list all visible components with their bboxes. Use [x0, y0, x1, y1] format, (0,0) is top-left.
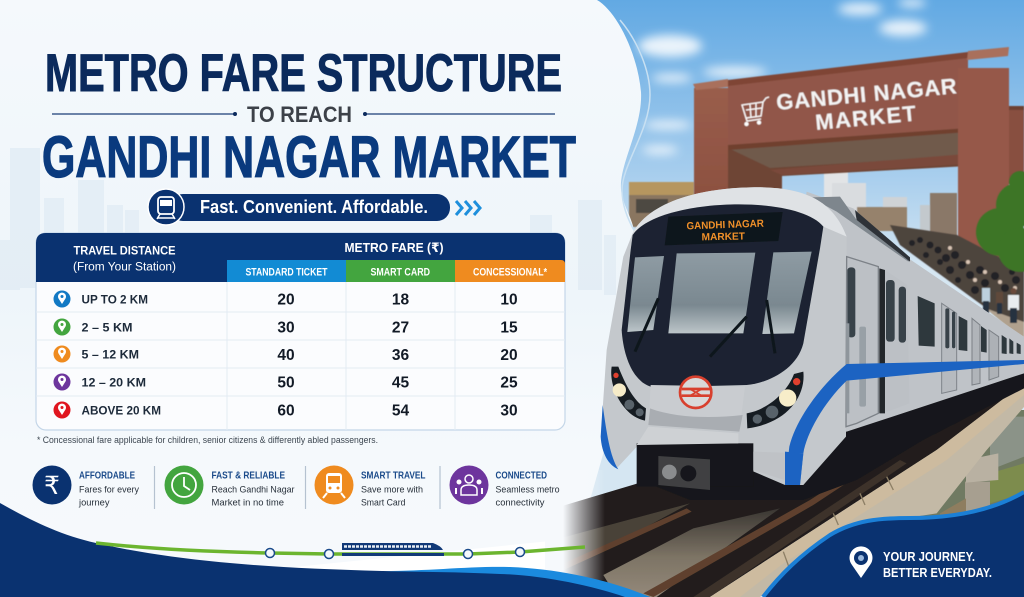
- feature: affordable: ₹: [44, 472, 60, 500]
- row: up to 2 km: [54, 290, 518, 308]
- destination display: [665, 212, 783, 245]
- feature: affordable: [32, 466, 139, 508]
- feature: fast and reliable: [164, 466, 294, 508]
- crowd street: [890, 225, 1024, 340]
- subtitle: to reach: [52, 102, 555, 127]
- train side body: [777, 192, 1024, 485]
- track fade into panel: [545, 470, 605, 580]
- row: 2-5 km: [54, 318, 518, 336]
- row: 12-20 km: [54, 374, 518, 392]
- front mask: [622, 204, 823, 387]
- row: up to 2 km: UP TO 2 KM: [82, 292, 148, 306]
- photo background: sky: [560, 0, 1024, 597]
- row: 12-20 km: 25: [500, 374, 518, 392]
- header: metro fare: METRO FARE (₹): [344, 240, 444, 255]
- row: 12-20 km: 50: [277, 374, 295, 392]
- footnote: * Concessional fare applicable for children, senior citizens & differently abled passengers.: [37, 435, 378, 445]
- destination display: GANDHI NAGAR: [686, 219, 765, 232]
- feature dividers: [154, 466, 440, 509]
- feature: connected: Seamless metro: [496, 484, 560, 496]
- roof grill: [810, 197, 910, 262]
- title: metro fare structure: METRO FARE STRUCTURE: [45, 44, 562, 103]
- coupler: [637, 443, 753, 490]
- feature: fast and reliable: FAST & RELIABLE: [212, 470, 285, 482]
- faint city skyline: [0, 148, 616, 295]
- row: 2-5 km: 15: [500, 320, 518, 336]
- icon: small train on line: [342, 543, 444, 556]
- feature: smart travel: SMART TRAVEL: [361, 470, 426, 482]
- undercarriage: [637, 373, 1024, 500]
- callout wave bottom right: [763, 492, 1024, 597]
- feature: affordable: AFFORDABLE: [79, 470, 135, 482]
- row: 12-20 km: 12 – 20 KM: [82, 376, 146, 390]
- metro route line: [96, 543, 585, 558]
- row: 5-12 km: [54, 346, 518, 364]
- row: above 20 km: [54, 402, 518, 420]
- row: 5-12 km: 20: [500, 347, 518, 364]
- column header: smart card: [346, 260, 455, 282]
- row: above 20 km: 60: [277, 402, 295, 420]
- title: gandhi nagar market: GANDHI NAGAR MARKET: [42, 125, 576, 190]
- row: above 20 km: ABOVE 20 KM: [82, 404, 161, 418]
- feature: smart travel: [314, 466, 426, 508]
- feature: connected: CONNECTED: [496, 470, 547, 482]
- train front body: [601, 187, 847, 485]
- header: travel distance: TRAVEL DISTANCE: [74, 246, 176, 258]
- feature: affordable: journey: [78, 498, 110, 508]
- column header: standard ticket: STANDARD TICKET: [246, 266, 328, 278]
- column header: concessional: CONCESSIONAL*: [473, 266, 548, 278]
- row: 5-12 km: 36: [392, 347, 409, 364]
- fare table: [36, 233, 565, 430]
- feature: fast and reliable: Market in no time: [212, 498, 284, 508]
- row: up to 2 km: 18: [392, 292, 409, 308]
- feature: fast and reliable: Reach Gandhi Nagar: [212, 484, 294, 496]
- metro train: [601, 187, 1024, 500]
- tagline pill: Fast. Convenient. Affordable.: [200, 197, 428, 217]
- header: travel distance: (From Your Station): [73, 262, 176, 274]
- cab windows: [627, 252, 812, 357]
- headlights: [611, 367, 804, 428]
- row: above 20 km: 30: [500, 402, 518, 420]
- navy wave bottom left: [0, 503, 650, 597]
- gate sign text: [775, 73, 958, 135]
- market gate with sign: [693, 47, 1024, 258]
- feature: connected: [450, 466, 560, 508]
- clouds: [638, 0, 927, 154]
- callout wave bottom right: YOUR JOURNEY.: [883, 549, 975, 564]
- row: 5-12 km: 5 – 12 KM: [82, 348, 139, 362]
- callout wave bottom right: BETTER EVERYDAY.: [883, 565, 992, 580]
- feature: smart travel: Save more with: [361, 484, 423, 496]
- gate sign text: MARKET: [814, 101, 918, 135]
- gate sign text: GANDHI NAGAR: [775, 73, 958, 115]
- light blue wave accent: [383, 567, 650, 597]
- viaduct and track: [560, 363, 1024, 597]
- chevrons: [456, 201, 480, 215]
- row: 12-20 km: 45: [392, 374, 409, 392]
- row: up to 2 km: 20: [277, 292, 295, 308]
- column header: standard ticket: [227, 260, 346, 282]
- feature: smart travel: Smart Card: [361, 498, 406, 508]
- row: 2-5 km: 2 – 5 KM: [82, 320, 133, 334]
- destination display: MARKET: [702, 232, 746, 243]
- header: travel distance: [73, 246, 176, 274]
- icon: shopping cart: [742, 97, 769, 126]
- tree: [976, 171, 1024, 272]
- row: 5-12 km: 40: [277, 347, 295, 364]
- lower front panel: [648, 385, 745, 432]
- row: above 20 km: 54: [392, 402, 409, 420]
- subtitle: to reach: TO REACH: [247, 102, 352, 127]
- icon: location pin: [850, 546, 872, 578]
- row: 2-5 km: 30: [277, 320, 295, 336]
- side windows and doors: [846, 257, 1021, 427]
- row: 2-5 km: 27: [392, 320, 409, 336]
- feature: connected: connectivity: [496, 498, 545, 508]
- left white panel with curved edge: [0, 0, 641, 597]
- metro logo: [680, 377, 711, 408]
- icon: train badge: [148, 189, 184, 225]
- distant buildings: [629, 170, 957, 255]
- feature: affordable: Fares for every: [79, 484, 139, 496]
- tagline pill: [148, 189, 450, 225]
- column header: smart card: SMART CARD: [370, 266, 430, 278]
- blue stripes: [785, 360, 1024, 485]
- panel thin outline: [620, 20, 650, 232]
- column header: concessional: [455, 260, 565, 282]
- row: up to 2 km: 10: [500, 292, 518, 308]
